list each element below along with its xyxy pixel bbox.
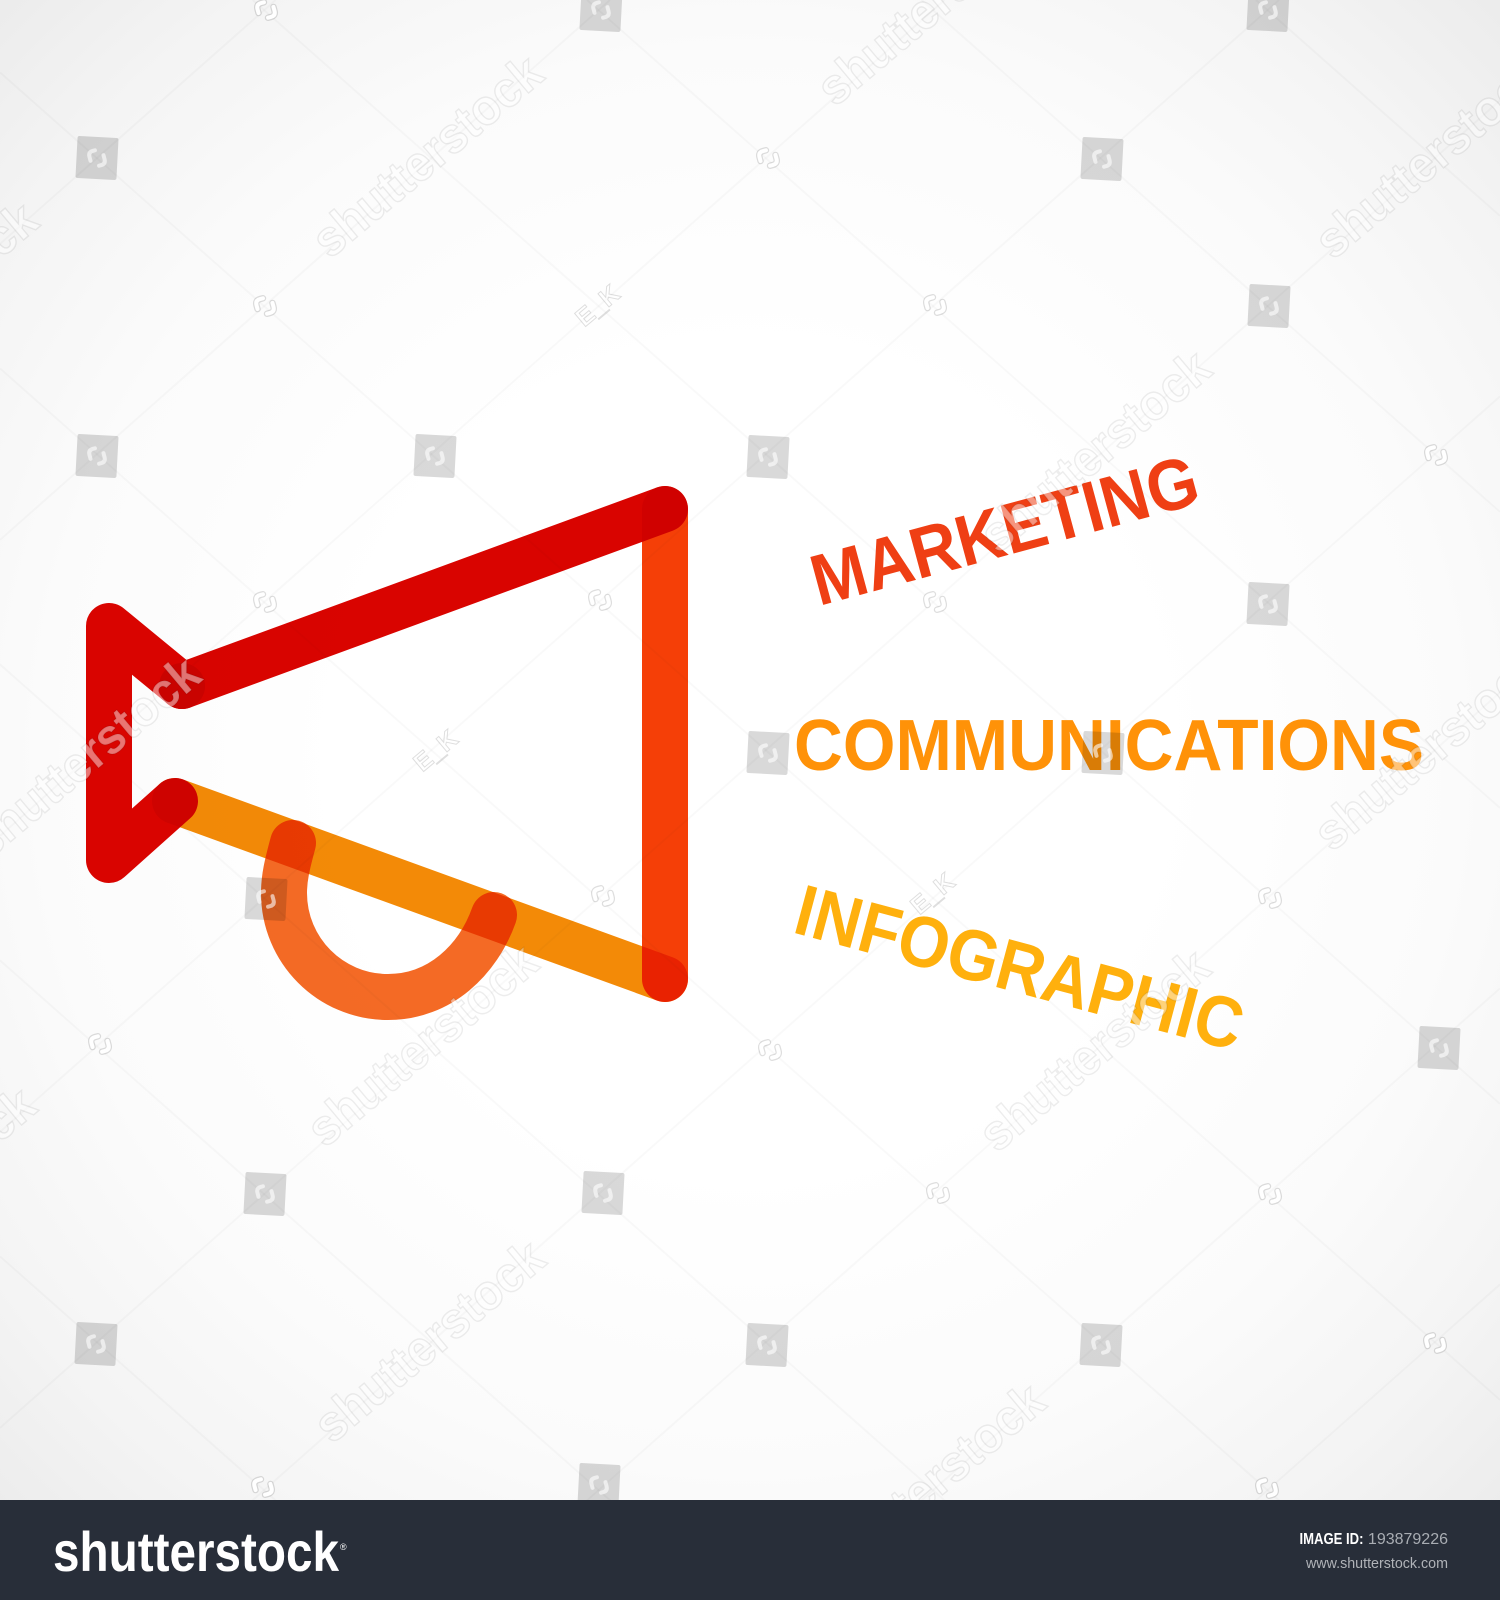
watermark: contributor tags: E_K <box>905 868 960 920</box>
megaphone lower edge <box>175 801 665 979</box>
footer registered mark: ® <box>340 1542 347 1552</box>
watermark: diagonal wordmarks: shutterstock <box>969 339 1221 563</box>
megaphone handle <box>284 843 494 997</box>
heading: marketing: MARKETING <box>802 441 1207 621</box>
watermark: diagonal wordmarks: shutterstock <box>803 1372 1055 1596</box>
watermark: diagonal wordmarks: shutterstock <box>968 938 1220 1162</box>
watermark: contributor tags: E_K <box>570 280 625 332</box>
megaphone rear chevron <box>109 626 182 860</box>
icon: megaphone <box>109 509 665 997</box>
watermark: diagonal wordmarks: shutterstock <box>301 44 553 268</box>
heading: infographic: INFOGRAPHIC <box>787 870 1252 1067</box>
footer logo: shutterstock <box>53 1520 340 1583</box>
footer image id: IMAGE ID: 193879226 <box>1299 1531 1448 1548</box>
heading: communications: COMMUNICATIONS <box>794 706 1424 786</box>
megaphone upper edge <box>182 509 665 686</box>
footer bar <box>0 1500 1500 1600</box>
watermark: contributor tags <box>408 280 960 920</box>
watermark: diagonal wordmarks: shutterstock <box>296 933 548 1157</box>
watermark: diagonal wordmarks: shutterstock <box>303 1229 555 1453</box>
megaphone joint overlap <box>159 663 205 709</box>
megaphone mouth <box>642 509 688 979</box>
footer url: www.shutterstock.com <box>1305 1555 1448 1572</box>
watermark: contributor tags: E_K <box>408 725 463 777</box>
